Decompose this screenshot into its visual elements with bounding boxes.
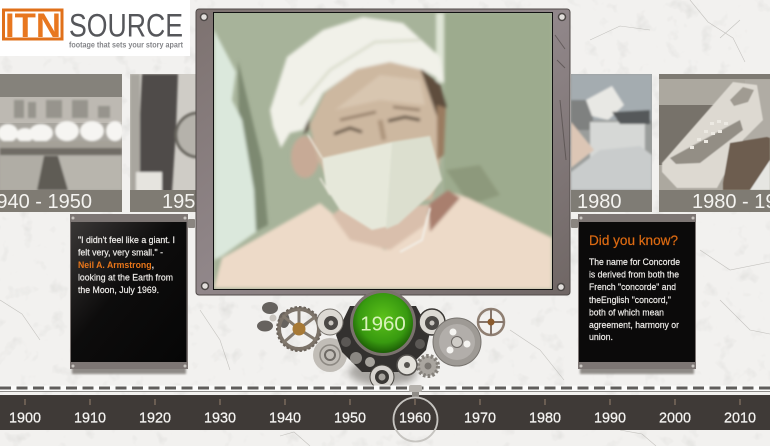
- logo: ITN Source: [0, 0, 190, 56]
- did you know body text: [589, 257, 680, 343]
- did you know body text: is derived from both the: [589, 270, 679, 280]
- photo card: 1940 - 1950: [0, 74, 124, 213]
- quote text: felt very, very small." -: [78, 248, 163, 258]
- gear machine with 1960 dial: [257, 290, 504, 389]
- quote text: [78, 235, 175, 296]
- icon: right turbine: [419, 309, 445, 335]
- icon: bronze gear: [277, 307, 321, 351]
- icon: hinge: [188, 219, 195, 228]
- icon: white pulley: [397, 355, 417, 375]
- icon: spiral disc: [313, 338, 347, 372]
- timeline year labels: 1930: [204, 410, 236, 426]
- timeline year labels: 1940: [269, 410, 301, 426]
- video still: surgeon in mask: [214, 13, 552, 289]
- panel: did you know: [571, 214, 696, 374]
- stitched rail: [0, 386, 770, 392]
- timeline year labels: 1920: [139, 410, 171, 426]
- panel: main video frame: [196, 9, 570, 295]
- icon: large pulley: [433, 318, 481, 366]
- did you know body text: union.: [589, 332, 613, 343]
- icon: left turbine: [317, 309, 343, 335]
- green 1960 dial: [350, 290, 416, 356]
- timeline year labels: 2000: [659, 410, 691, 426]
- logo mark: ITN orange box: ITN: [5, 7, 61, 45]
- did you know body text: both of which mean: [589, 308, 664, 318]
- timeline year labels: 1910: [74, 410, 106, 426]
- icon: bottom pulley: [370, 365, 394, 389]
- icon: hinge: [571, 219, 578, 228]
- photo card: 195x: [130, 74, 196, 212]
- timeline slider ring: [394, 385, 438, 442]
- photo card: 1980: [571, 74, 652, 213]
- did you know body text: agreement, harmony or: [589, 320, 679, 331]
- did you know body text: theEnglish "concord,": [589, 295, 671, 306]
- timeline year labels: [9, 410, 756, 426]
- timeline year labels: 1950: [334, 410, 366, 426]
- metal frame: [196, 9, 570, 295]
- quote text: Neil A. Armstrong,: [78, 260, 154, 271]
- timeline: [0, 385, 770, 442]
- did you know body text: The name for Concorde: [589, 257, 680, 268]
- did you know body text: French "concorde" and: [589, 282, 676, 293]
- timeline year labels: 2010: [724, 410, 756, 426]
- timeline year labels: 1980: [529, 410, 561, 426]
- icon: propeller: [257, 302, 290, 332]
- timeline ticks: [25, 399, 740, 405]
- photo card: 195x: 195: [162, 191, 195, 213]
- icon: small bronze wheel: [478, 309, 504, 335]
- timeline year labels: 1990: [594, 410, 626, 426]
- green 1960 dial: 1960: [360, 312, 406, 336]
- icon: small gear: [418, 356, 438, 376]
- photo card: 1980: 1980: [577, 191, 622, 213]
- timeline year labels: 1900: [9, 410, 41, 426]
- did you know heading: Did you know?: [589, 232, 678, 248]
- quote text: looking at the Earth from: [78, 272, 173, 284]
- timeline year labels: 1960: [399, 410, 431, 426]
- panel: astronaut quote: [70, 214, 195, 374]
- quote text: "I didn't feel like a giant. I: [78, 235, 175, 246]
- timeline year labels: 1970: [464, 410, 496, 426]
- quote text: the Moon, July 1969.: [78, 285, 159, 296]
- logo wordmark: SOURCE: [69, 8, 183, 44]
- logo tagline: footage that sets your story apart: [69, 40, 183, 50]
- icon: engine block: [336, 306, 430, 372]
- timeline bar: [0, 395, 770, 430]
- photo card: 1980 - 1990 mobile phone: [659, 74, 770, 213]
